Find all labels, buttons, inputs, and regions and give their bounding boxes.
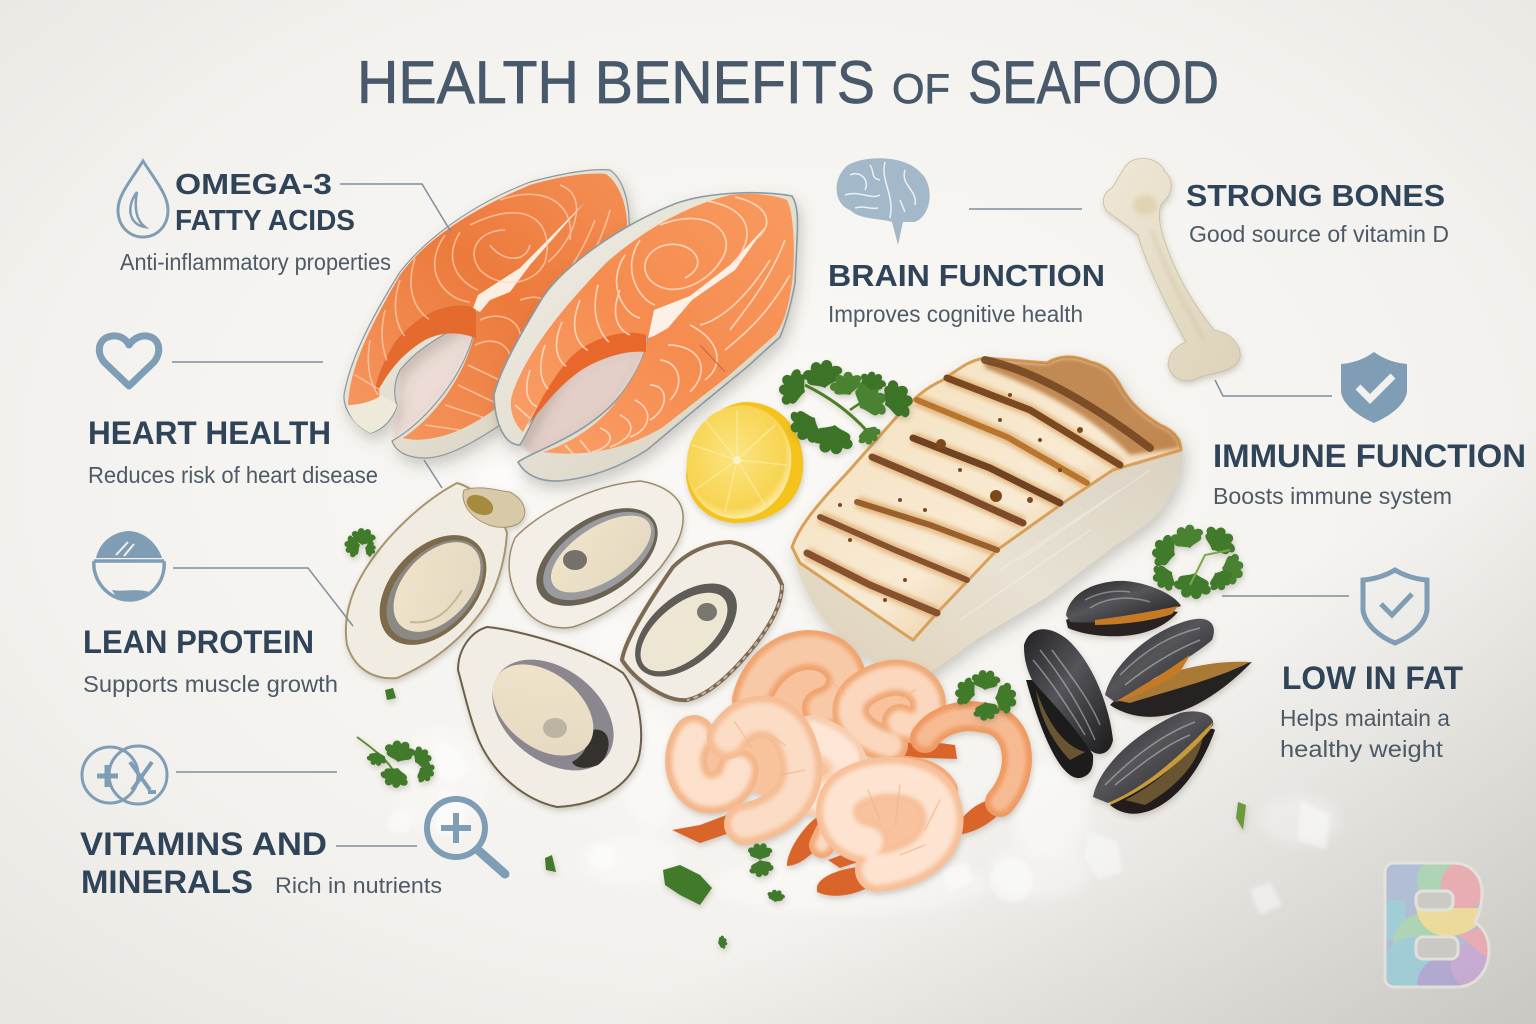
mussel left bbox=[1024, 629, 1113, 778]
title: SEAFOOD bbox=[968, 49, 1219, 116]
benefit: vitamins and minerals: MINERALS bbox=[81, 864, 253, 900]
title: OF bbox=[892, 65, 950, 112]
icon: magnifier bbox=[427, 799, 505, 874]
mussels bbox=[1024, 581, 1252, 814]
shrimp tails bbox=[672, 738, 1003, 896]
shrimp pile bbox=[672, 646, 1017, 896]
mussel bottom bbox=[1093, 711, 1215, 814]
benefit: brain function: Improves cognitive health bbox=[828, 301, 1083, 327]
benefit: strong bones: STRONG BONES bbox=[1186, 178, 1445, 213]
benefit: vitamins and minerals bbox=[80, 746, 505, 900]
benefit: omega-3: OMEGA-3 bbox=[175, 169, 332, 201]
oyster bottom bbox=[458, 627, 641, 807]
mussel top bbox=[1066, 581, 1181, 636]
salmon steak back bbox=[344, 170, 629, 458]
benefit: lean protein: Supports muscle growth bbox=[83, 671, 338, 697]
benefit: omega-3: Anti-inflammatory properties bbox=[120, 249, 391, 275]
oyster top middle bbox=[509, 481, 683, 628]
benefit: omega-3: FATTY ACIDS bbox=[175, 205, 355, 237]
shrimp body fill bbox=[682, 646, 937, 851]
benefit: immune function: Boosts immune system bbox=[1213, 483, 1452, 509]
mussel middle bbox=[1105, 619, 1252, 717]
benefit: low in fat bbox=[1222, 570, 1463, 762]
grilled fish fillet bbox=[792, 357, 1183, 678]
benefit: immune function bbox=[1213, 352, 1526, 509]
icon: water drop bbox=[118, 161, 168, 237]
benefit: strong bones: Good source of vitamin D bbox=[1189, 221, 1449, 247]
salmon steak front bbox=[494, 193, 797, 481]
benefit: low in fat: Helps maintain a bbox=[1280, 705, 1450, 731]
title: HEALTH BENEFITS bbox=[357, 49, 875, 116]
parsley large bbox=[774, 358, 918, 457]
oyster right bbox=[618, 542, 782, 700]
benefit: omega-3 bbox=[118, 161, 451, 275]
benefit: vitamins and minerals: VITAMINS AND bbox=[80, 826, 327, 862]
benefit: lean protein bbox=[83, 531, 353, 697]
icon: heart bbox=[99, 336, 159, 386]
benefit: brain function bbox=[828, 158, 1105, 327]
icon: vitamins bbox=[82, 746, 167, 804]
benefit: heart health bbox=[88, 336, 442, 488]
benefit: immune function: IMMUNE FUNCTION bbox=[1213, 438, 1526, 474]
crushed ice bbox=[388, 463, 1340, 915]
benefit: vitamins and minerals: Rich in nutrients bbox=[275, 873, 442, 898]
icon: solid shield bbox=[1341, 352, 1407, 423]
benefit: lean protein: LEAN PROTEIN bbox=[83, 624, 314, 660]
lemon half bbox=[674, 393, 804, 531]
title bbox=[357, 49, 1219, 116]
benefit: low in fat: healthy weight bbox=[1280, 736, 1444, 762]
benefit: heart health: HEART HEALTH bbox=[88, 415, 331, 451]
oyster top left bbox=[346, 483, 525, 678]
logo: colourful B bbox=[1384, 862, 1490, 988]
benefit: strong bones bbox=[1186, 178, 1449, 247]
benefit: heart health: Reduces risk of heart disease bbox=[88, 462, 378, 488]
bone bbox=[1103, 158, 1240, 381]
parsley small sprigs bbox=[343, 526, 1246, 950]
icon: brain bbox=[836, 158, 930, 245]
icon: bowl bbox=[94, 531, 164, 600]
benefit: brain function: BRAIN FUNCTION bbox=[828, 258, 1105, 293]
icon: outline shield bbox=[1363, 570, 1427, 643]
benefit: low in fat: LOW IN FAT bbox=[1282, 660, 1463, 696]
parsley right bbox=[1148, 520, 1245, 602]
